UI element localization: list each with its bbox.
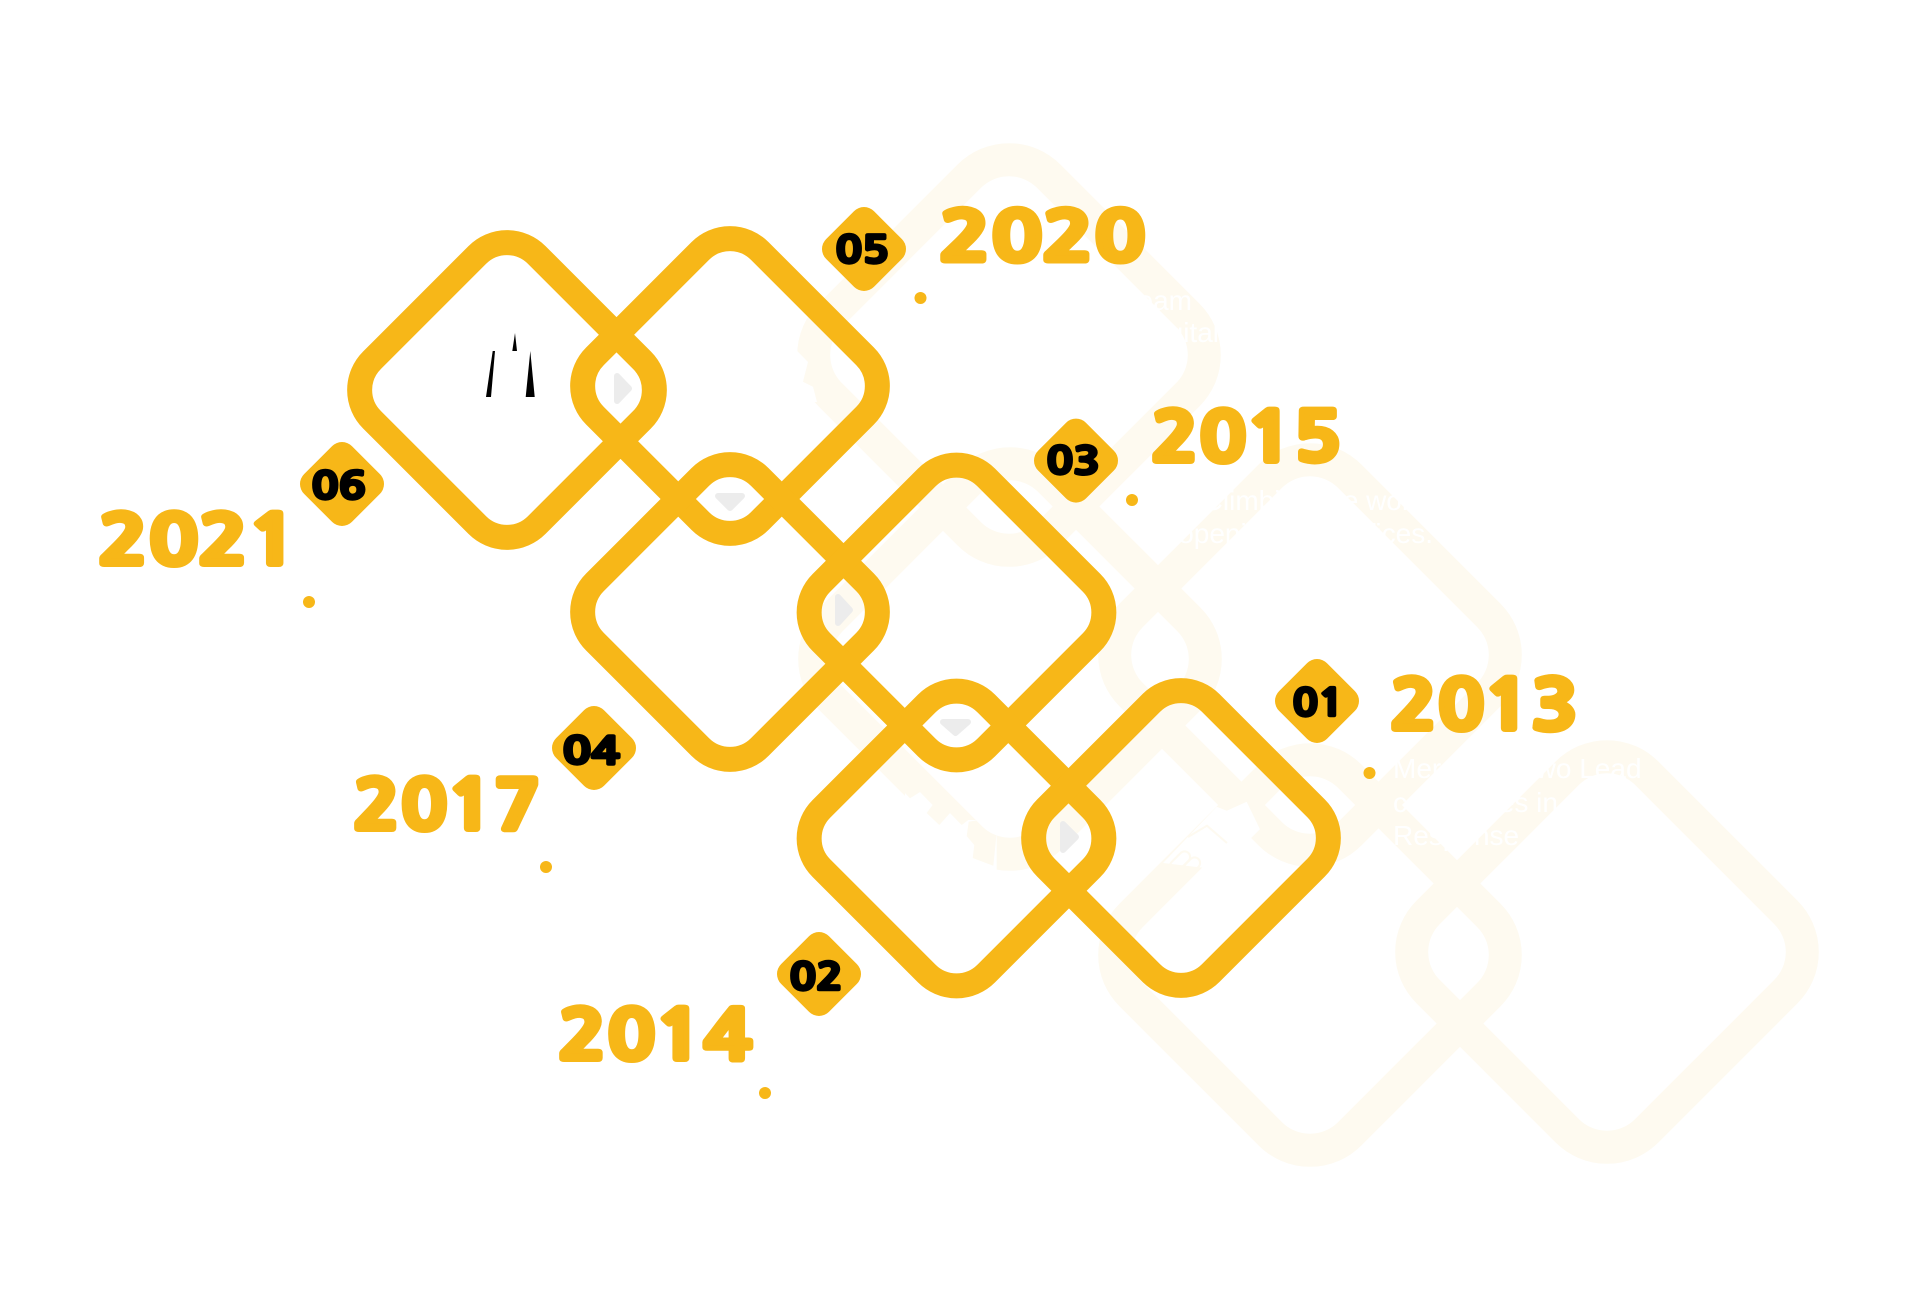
description: Climbing the world — [1203, 485, 1433, 516]
badge 06: 06 — [311, 468, 366, 505]
year 2021: 2021 — [98, 508, 298, 574]
badge 05: 05 — [835, 232, 889, 269]
year 2015: 2015 — [1151, 404, 1341, 472]
description: digital — [1146, 317, 1219, 348]
icons: grey triangles in the lattice lenses — [617, 376, 1076, 850]
year 2020: 2020 — [939, 204, 1145, 271]
description: companies in Crisis — [1393, 787, 1636, 818]
badge 01 — [1269, 653, 1365, 749]
badge 06 — [294, 436, 390, 532]
event: 2013 — [1269, 653, 1642, 851]
bullet — [540, 861, 552, 873]
event: 2021 — [98, 436, 390, 608]
bullet — [759, 1087, 771, 1099]
badge 04: 04 — [562, 733, 620, 770]
year 2017: 2017 — [353, 772, 541, 840]
event: 2020 — [816, 201, 1219, 348]
badge 01: 01 — [1292, 685, 1344, 722]
event: 2015 — [1028, 404, 1433, 549]
description: Response — [1393, 820, 1519, 851]
white knock-out shapes over the pale lattice — [790, 345, 1260, 885]
bullet — [1364, 767, 1376, 779]
icon: black slivers inside the top-left diamond — [486, 333, 535, 397]
bullet — [914, 292, 926, 304]
badge 03: 03 — [1046, 443, 1100, 480]
event: 2014 — [558, 926, 867, 1099]
description: team — [1130, 285, 1192, 316]
icon: pale outline fragments — [1168, 826, 1227, 880]
badge 02 — [771, 926, 867, 1022]
description: Merger of Two Lead — [1393, 753, 1642, 784]
badge 02: 02 — [789, 959, 843, 996]
badge 05 — [816, 201, 912, 297]
pale background diamond lattice — [791, 137, 1825, 1173]
bullet — [303, 596, 315, 608]
badge 04 — [546, 700, 642, 796]
year 2013: 2013 — [1390, 672, 1578, 740]
badge 03 — [1028, 413, 1124, 508]
event: 2017 — [353, 700, 642, 873]
bullet — [1126, 494, 1138, 506]
year 2014: 2014 — [558, 1002, 752, 1070]
description: opening new offices. — [1178, 518, 1433, 549]
main diamond lattice — [342, 221, 1346, 1003]
